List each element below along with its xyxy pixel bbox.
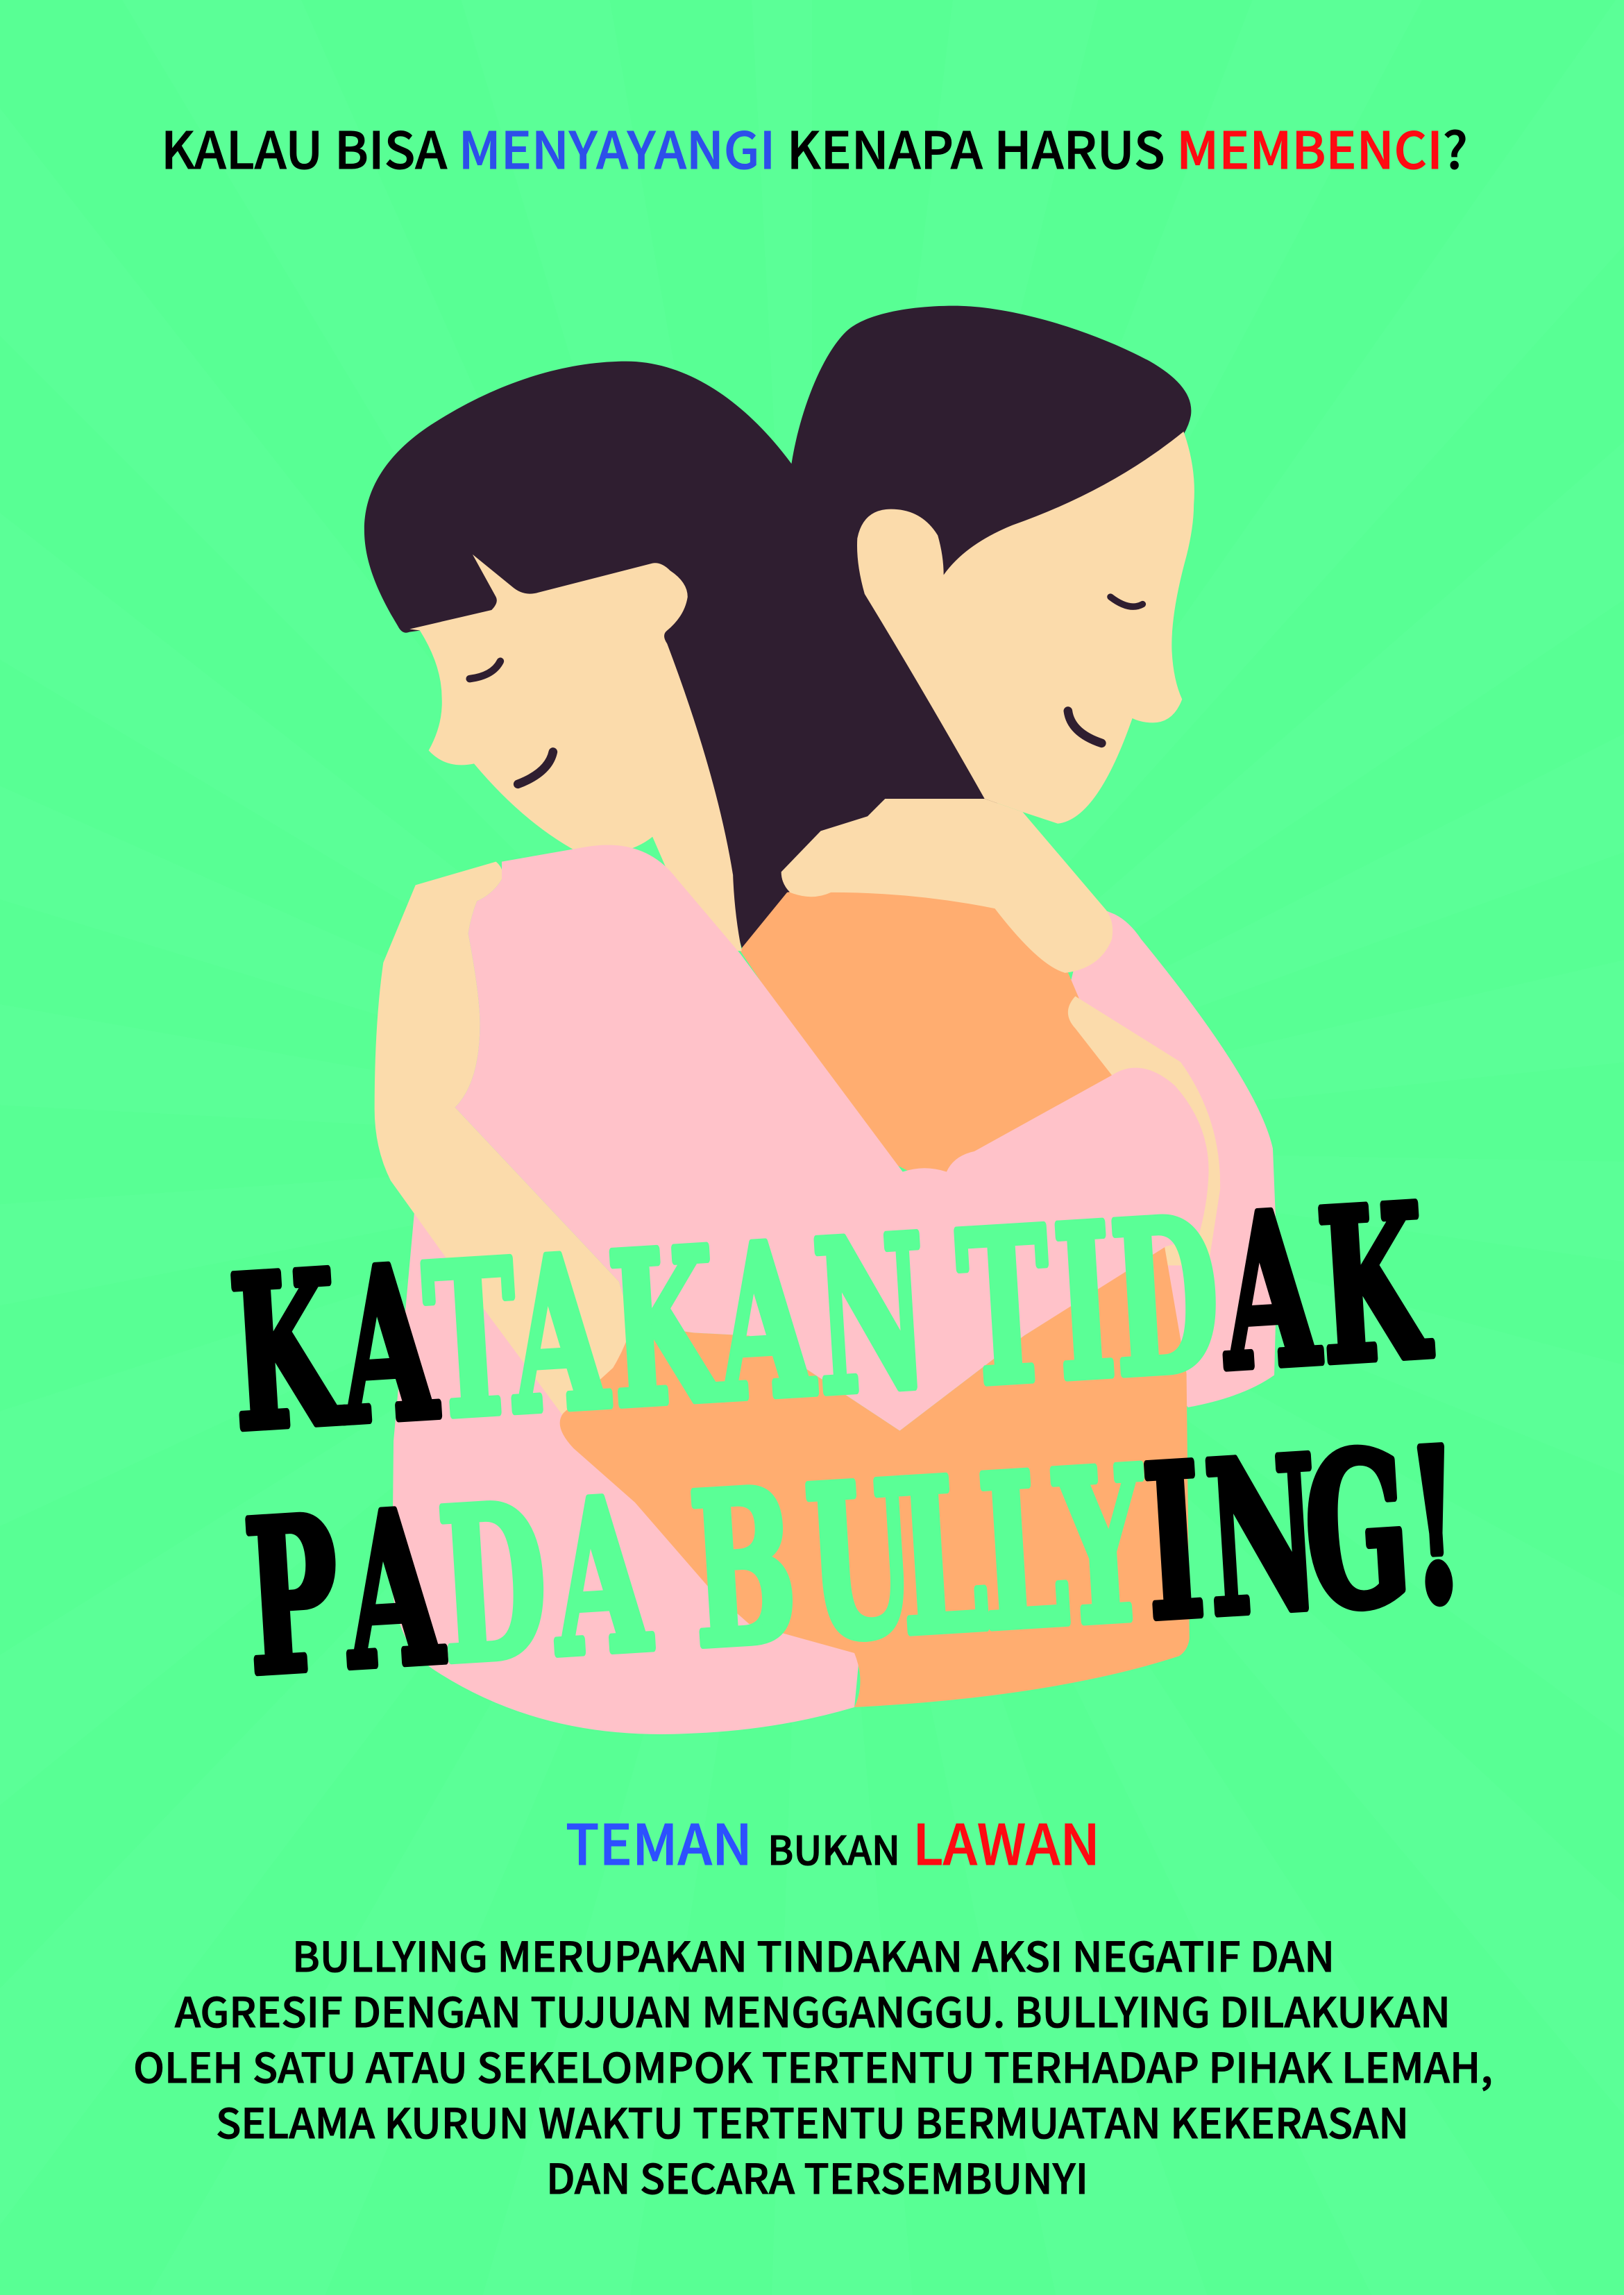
body paragraph: BULLYING MERUPAKAN TINDAKAN AKSI NEGATIF DAN <box>292 1924 1335 1983</box>
right woman's eye <box>1110 597 1142 607</box>
body paragraph: OLEH SATU ATAU SEKELOMPOK TERTENTU TERHADAP PIHAK LEMAH, <box>133 2035 1493 2094</box>
right woman's face <box>857 432 1194 824</box>
illustration: two women hugging <box>364 306 1277 1734</box>
subtitle word: teman: TEMAN <box>566 1801 752 1881</box>
title line 1: KATAKAN TIDAK <box>225 1160 1437 1477</box>
right woman's smile <box>1068 711 1101 743</box>
right woman's hand <box>1068 997 1220 1265</box>
body paragraph <box>133 1924 1493 2205</box>
right woman's orange torso <box>741 878 1115 1185</box>
heading: top tagline: KALAU BISA MENYAYANGI KENAPA HARUS MEMBENCI? <box>161 110 1468 184</box>
title: katakan tidak pada bullying <box>225 1160 1470 1722</box>
hugging pink sleeve <box>455 845 1209 1431</box>
left woman's pink lower body <box>392 1200 878 1734</box>
right woman's shoulder and arm <box>781 799 1113 973</box>
orange lower shirt <box>560 1246 1190 1707</box>
left woman's smile <box>518 752 553 784</box>
subtitle word: bukan: BUKAN <box>768 1820 900 1877</box>
left woman's arm <box>375 862 632 1416</box>
body paragraph: DAN SECARA TERSEMBUNYI <box>546 2146 1088 2205</box>
hair of both women <box>364 306 1191 948</box>
title line 2: PADA BULLYING! <box>239 1403 1470 1722</box>
left woman's eye <box>470 661 500 679</box>
body paragraph: SELAMA KURUN WAKTU TERTENTU BERMUATAN KEKERASAN <box>216 2091 1409 2150</box>
body paragraph: AGRESIF DENGAN TUJUAN MENGGANGGU. BULLYING DILAKUKAN <box>175 1980 1450 2039</box>
subtitle: teman bukan lawan <box>566 1801 1100 1881</box>
left woman's face and neck <box>409 554 742 951</box>
subtitle word: lawan: LAWAN <box>913 1801 1100 1881</box>
right woman's far sleeve <box>1024 904 1277 1407</box>
